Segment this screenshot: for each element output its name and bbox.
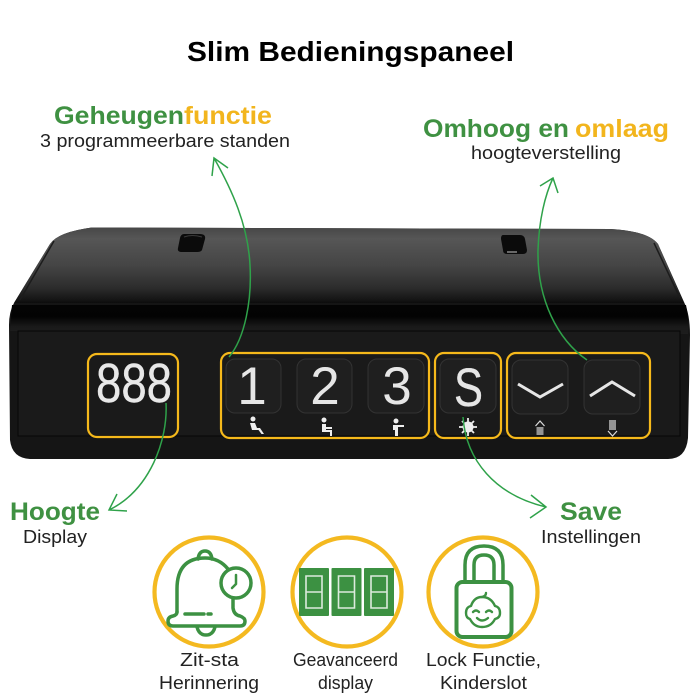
display digits: 888	[96, 352, 172, 414]
feature: display circle with LED icon	[292, 538, 402, 646]
arrow: height display	[109, 403, 166, 511]
highlight: memory buttons box	[221, 353, 429, 438]
button 2: 2	[310, 357, 340, 416]
label: reminder: Herinnering	[159, 673, 259, 693]
icon: brightness	[459, 418, 477, 436]
label: lock function	[426, 650, 541, 693]
arrow: up and down	[538, 178, 587, 360]
icon: LED digits	[299, 568, 394, 616]
label: advanced display: display	[318, 673, 373, 693]
label: lock function: Kinderslot	[440, 673, 527, 693]
heading: Omhoog en omlaag: Omhoog en	[423, 115, 569, 143]
top surface	[14, 228, 684, 303]
label: advanced display: Geavanceerd	[293, 650, 398, 670]
label: lock function: Lock Functie,	[426, 650, 541, 670]
heading: Geheugenfunctie: functie	[184, 102, 272, 130]
front face	[18, 331, 680, 436]
shoulder	[10, 305, 688, 334]
heading: Omhoog en omlaag: omlaag	[575, 115, 669, 143]
arrow: memory function	[212, 158, 250, 357]
highlight: save box	[435, 353, 501, 438]
label: reminder: Zit-sta	[180, 650, 240, 670]
heading: Omhoog en omlaag	[423, 115, 669, 143]
button 2	[297, 357, 352, 416]
button down	[512, 360, 568, 414]
subtext: height adjustment: hoogteverstelling	[471, 143, 621, 163]
subtext: Instellingen: Instellingen	[541, 527, 641, 547]
button 1	[226, 357, 281, 416]
label: advanced display	[293, 650, 398, 693]
heading: Save: Save	[560, 498, 622, 526]
icon: standing	[393, 418, 404, 436]
arrow: save	[463, 417, 546, 518]
button 3	[368, 357, 424, 416]
icon: down small	[608, 421, 617, 436]
button S	[440, 358, 496, 418]
button 1: 1	[237, 357, 267, 416]
housing body	[9, 228, 690, 459]
feature: reminder circle with bell icon	[154, 538, 264, 646]
feature: lock circle with baby icon	[428, 538, 538, 646]
icon: reclined seat	[250, 416, 264, 434]
icon: up small	[536, 421, 544, 434]
button up	[584, 360, 640, 414]
title: Slim Bedieningspaneel	[187, 36, 514, 67]
icon: baby face	[466, 593, 500, 627]
icon: padlock	[456, 546, 512, 637]
heading: Geheugenfunctie	[54, 102, 272, 130]
label: reminder	[159, 650, 259, 693]
heading: Geheugenfunctie: Geheugen	[54, 102, 184, 130]
heading: Hoogte: Hoogte	[10, 498, 100, 526]
icon: bell	[168, 551, 251, 635]
button 3: 3	[382, 357, 412, 416]
icon: upright seat	[322, 418, 332, 436]
highlight: display box	[88, 354, 178, 437]
device: control panel housing	[9, 228, 690, 459]
slot left	[178, 234, 205, 252]
button S: S	[454, 358, 483, 418]
subtext: Display: Display	[23, 527, 87, 547]
slot right	[501, 235, 527, 254]
subtext: programmable positions: 3 programmeerbare standen	[40, 131, 290, 151]
top bevel line right	[654, 243, 680, 298]
top bevel line left	[20, 241, 54, 300]
highlight: up/down box	[507, 353, 650, 438]
